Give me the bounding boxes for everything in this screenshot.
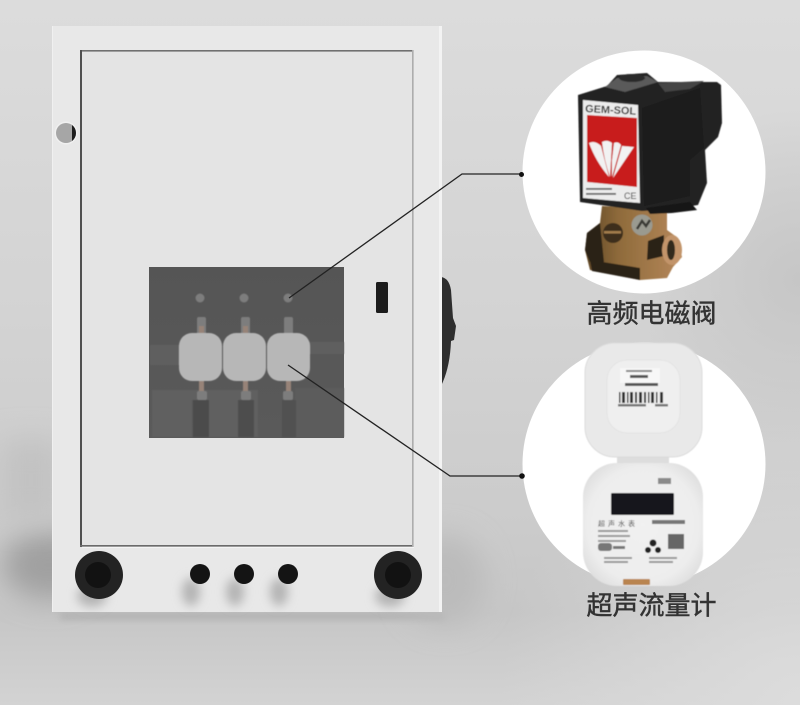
flow meters [179, 333, 222, 381]
meter title: 超声水表 [598, 519, 638, 528]
label: flow meter: 超声流量计 [586, 590, 717, 620]
latch hole [54, 122, 78, 144]
logo [589, 141, 634, 178]
port shadows [77, 578, 405, 607]
left gland [75, 551, 123, 599]
lid label [620, 368, 660, 383]
slot [376, 282, 388, 313]
valve illustration [578, 73, 722, 280]
pipe stub [623, 579, 650, 585]
port 2 [234, 564, 254, 584]
door [80, 50, 414, 548]
side knob [441, 277, 456, 386]
cabinet body [52, 26, 442, 612]
display [611, 493, 674, 515]
NB badge [598, 543, 612, 551]
brass body [585, 206, 682, 280]
circle: solenoid valve [522, 50, 766, 294]
valve label [583, 100, 640, 203]
label: solenoid valve: 高频电磁阀 [586, 298, 717, 328]
QR code [668, 534, 684, 549]
brand: GEM-SOL [585, 103, 637, 118]
meter base [583, 463, 703, 586]
radiation style logo [645, 540, 661, 553]
callout line: flow meter [288, 365, 525, 479]
meter illustration [583, 343, 703, 586]
valve illustration: CE [624, 191, 637, 201]
window panel [149, 267, 344, 438]
cabinet [52, 26, 456, 612]
circle: flow meter [522, 342, 766, 586]
meter lid [585, 343, 702, 457]
valves row [196, 294, 293, 400]
callout line: solenoid valve [289, 172, 524, 298]
port 1 [190, 564, 210, 584]
barcode [619, 392, 663, 403]
right gland [374, 551, 422, 599]
solenoid coil [578, 73, 722, 211]
hinge [617, 454, 669, 464]
port 3 [278, 564, 298, 584]
